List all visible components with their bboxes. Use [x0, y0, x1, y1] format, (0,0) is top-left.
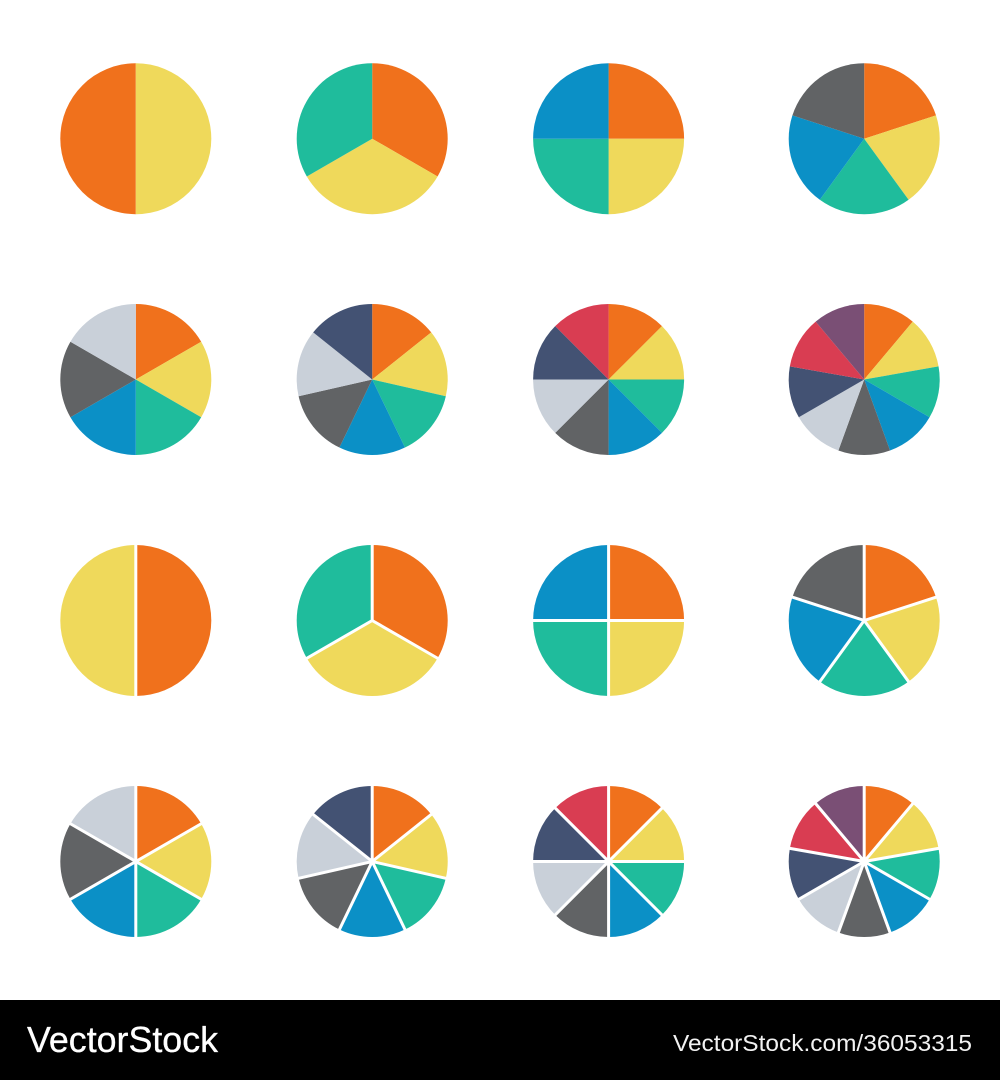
panel: plain pie charts row 2 [60, 304, 940, 455]
pie chart: 4 slices [533, 63, 684, 214]
pie chart: 4 separated slices [533, 545, 684, 696]
pie chart: 6 separated slices [60, 786, 211, 937]
pie chart: 8 separated slices [533, 786, 684, 937]
panel: separated pie charts row 3 [60, 545, 940, 696]
panel: separated pie charts row 4 [60, 786, 940, 937]
pie chart: 7 separated slices [297, 786, 448, 937]
pie chart: 6 slices [60, 304, 211, 455]
image id text: VectorStock.com/36053315 [673, 1030, 972, 1056]
brand logo text: VectorStock [27, 1019, 219, 1060]
pie chart: 5 slices [789, 63, 940, 214]
pie chart: 3 slices [297, 63, 448, 214]
footer background [0, 1000, 1000, 1080]
pie chart: 2 slices [60, 63, 211, 214]
pie chart: 5 separated slices [789, 545, 940, 696]
pie chart: 2 separated slices [60, 545, 211, 696]
footer bar [0, 1000, 1000, 1080]
pie chart: 3 separated slices [297, 545, 448, 696]
pie chart: 8 slices [533, 304, 684, 455]
pie chart: 9 separated slices [789, 786, 940, 937]
pie chart: 9 slices [789, 304, 940, 455]
pie chart: 7 slices [297, 304, 448, 455]
panel: plain pie charts row 1 [60, 63, 940, 214]
